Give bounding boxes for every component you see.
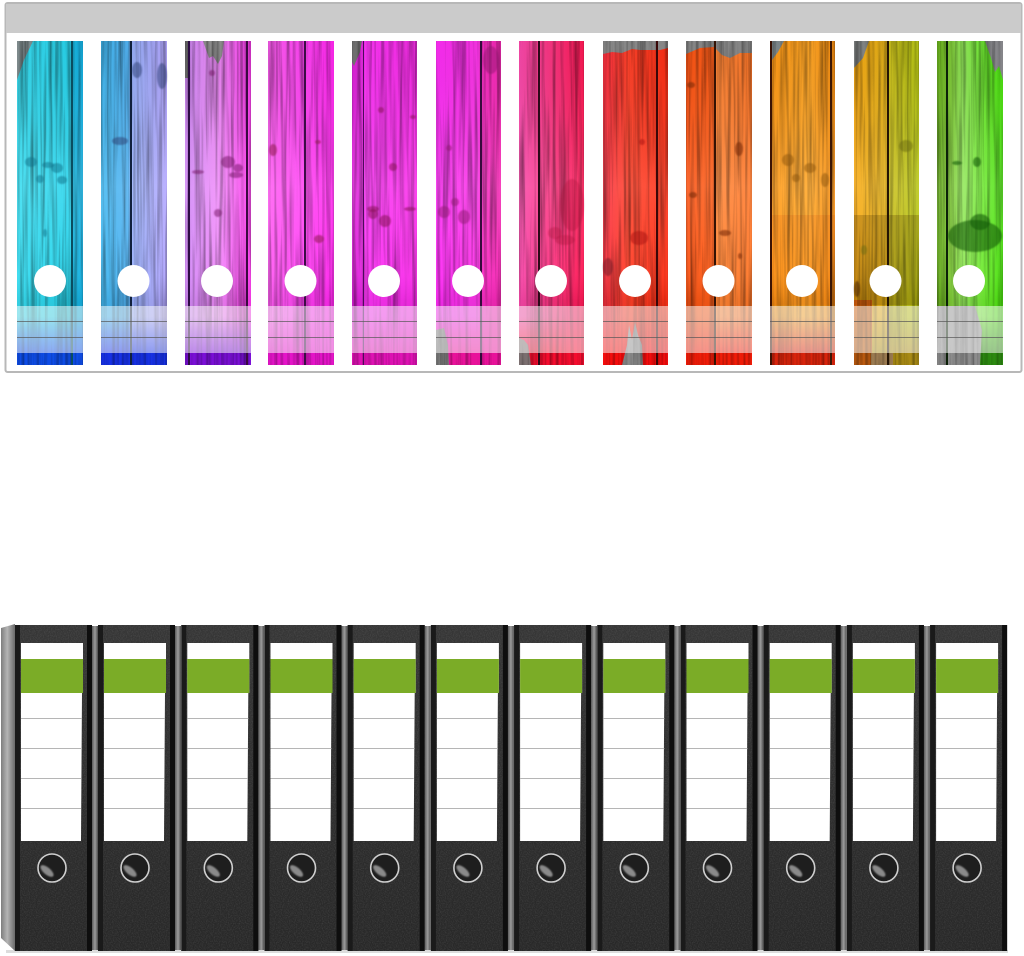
binder 4 xyxy=(264,625,342,951)
binder 12 xyxy=(930,625,1007,951)
spine label 10: orange xyxy=(770,41,835,365)
spine label 7: crimson pink xyxy=(519,41,584,365)
spine label 2: blue violet xyxy=(101,41,167,365)
spine label 9: red orange xyxy=(686,41,752,365)
sheet frame xyxy=(6,3,1022,372)
binder side panel xyxy=(1,624,15,951)
label sheet panel xyxy=(6,3,1022,372)
spine label 1: cyan xyxy=(17,41,83,365)
punched finger holes xyxy=(34,265,985,297)
binder 2 xyxy=(98,625,175,951)
binder 11 xyxy=(847,625,924,951)
spine label 6: pink magenta xyxy=(436,41,501,365)
binder row xyxy=(1,624,1008,953)
binder side gaps xyxy=(92,626,930,950)
spine label 8: red xyxy=(603,41,668,365)
grey header bar xyxy=(6,4,1021,33)
spine label 5: magenta purple xyxy=(352,41,417,365)
binder 10 xyxy=(764,625,841,951)
binder 3 xyxy=(181,625,258,951)
spine label 11: yellow olive xyxy=(854,41,919,365)
binder 1 xyxy=(15,625,92,951)
binder 9 xyxy=(680,625,758,951)
spine label 4: magenta xyxy=(268,41,334,365)
binder 6 xyxy=(431,625,508,951)
spine label 12: green xyxy=(937,41,1003,365)
binder 5 xyxy=(348,625,425,951)
binder 7 xyxy=(514,625,591,951)
binder 8 xyxy=(597,625,674,951)
spine label 3: violet magenta xyxy=(185,41,251,365)
translucent label bands xyxy=(17,306,1003,353)
binder shadow xyxy=(6,950,1008,953)
